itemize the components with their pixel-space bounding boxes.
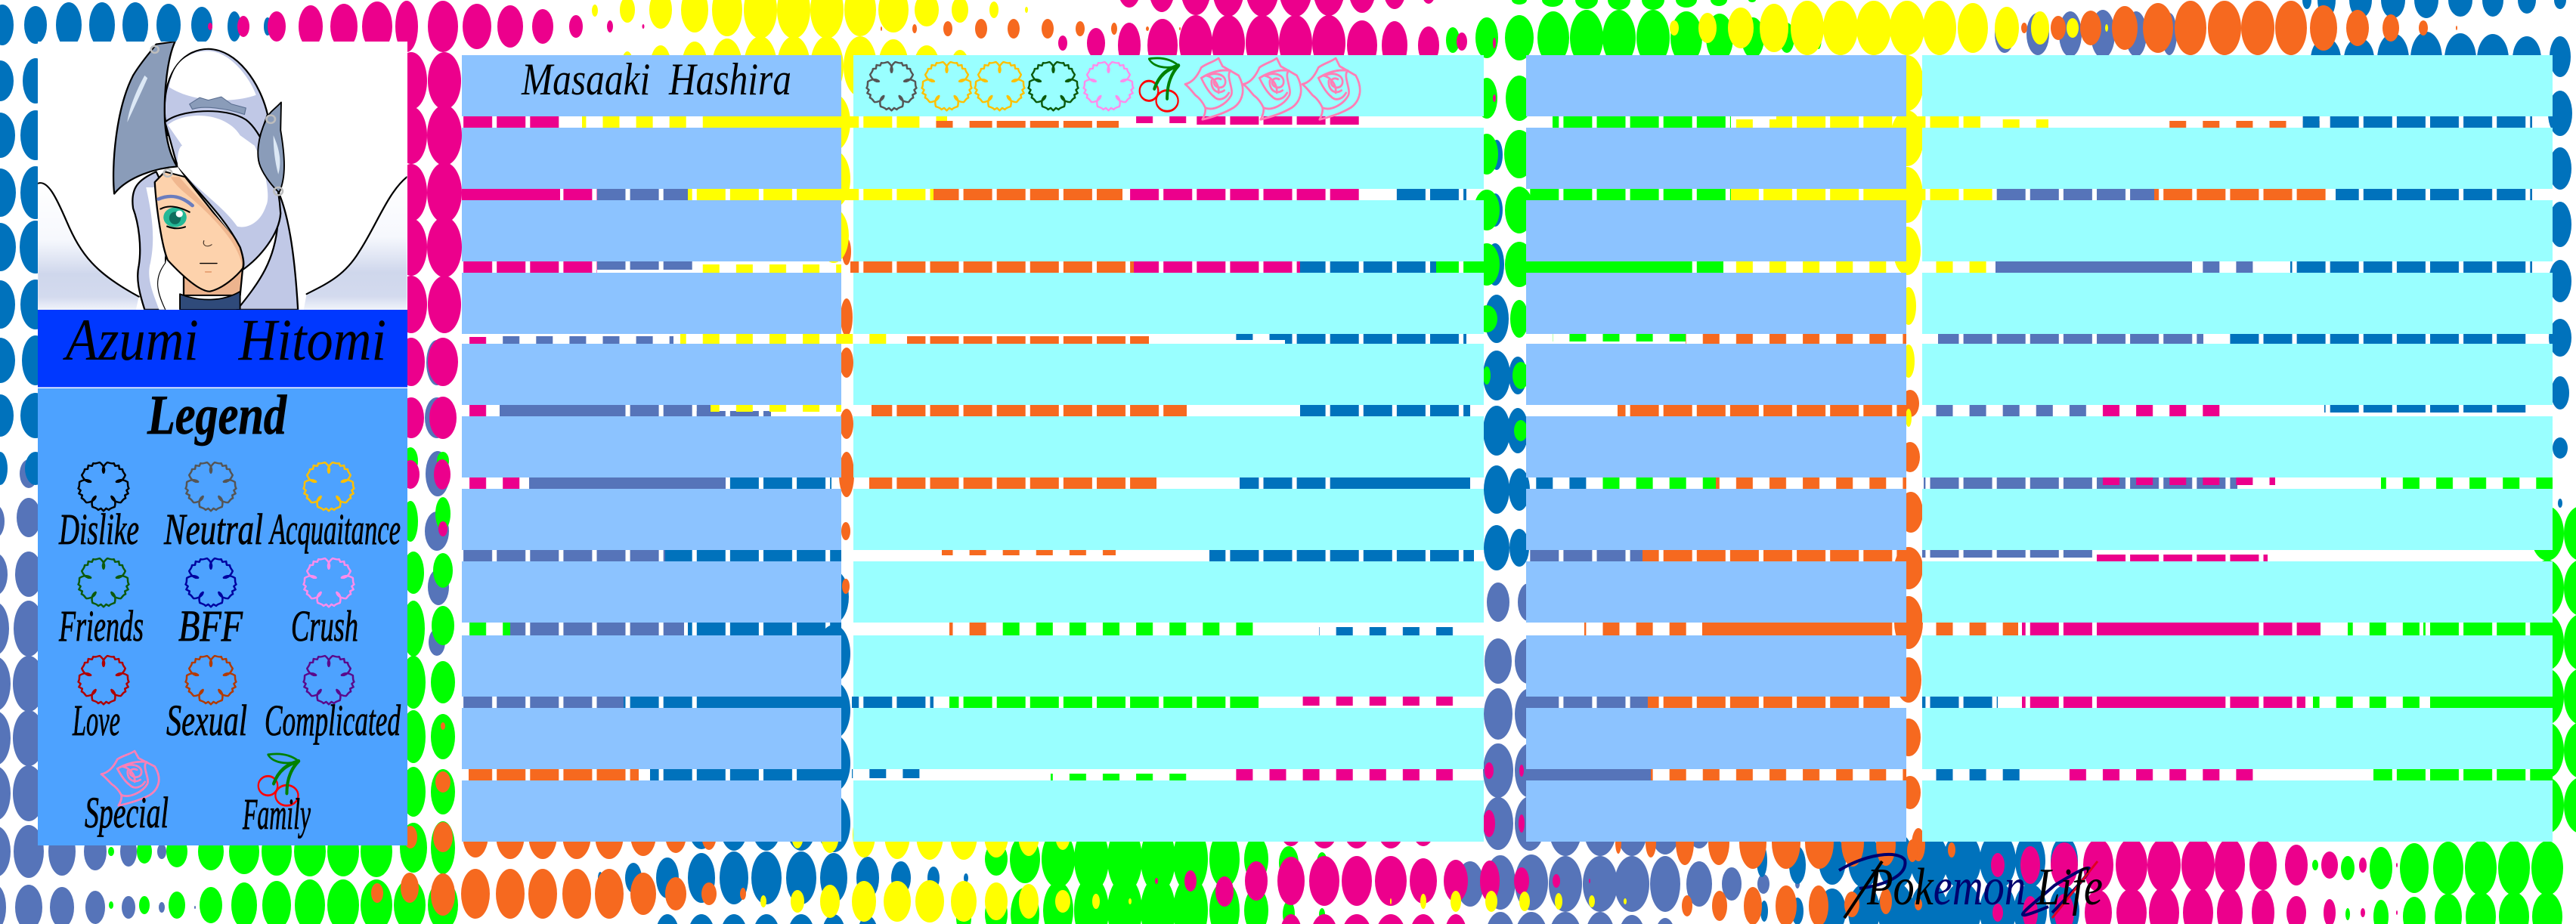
legend item: Acquaitance: Acquaitance [268,505,401,554]
legend item: Acquaitance [268,459,401,554]
legend item: BFF: BFF [178,601,243,651]
legend item: Dislike: Dislike [58,505,139,554]
legend item: Sexual [166,652,247,745]
panel: legend [38,385,407,845]
silver rings [151,46,283,195]
legend item: Special [85,751,169,837]
back of hair bun [165,49,268,135]
legend item: Sexual: Sexual [166,696,247,745]
left wing [38,234,139,310]
right wing [304,230,407,310]
panel: first table, name column [462,55,841,842]
legend item: Crush [291,555,358,651]
legend item: Neutral: Neutral [163,505,263,554]
signature: Pokemon Life: Pokemon Life [1866,858,2103,916]
legend item: BFF [178,555,243,651]
panel: second table, name column [1526,55,1906,842]
panel: character portrait [38,42,407,310]
legend item: Friends [58,555,144,651]
panel: second table, relationship column [1922,55,2553,842]
icon: family cherry [1140,58,1178,111]
fringe hair [165,111,280,270]
legend item: Neutral [163,459,263,554]
icon: acquaintance flower [972,58,1027,110]
row name: Masaaki Hashira: Masaaki Hashira [521,54,791,104]
headband frill [190,97,246,115]
icon: special rose [1243,58,1301,119]
right blade ornament [258,102,284,193]
legend item: Love [72,652,132,745]
panel: first table, relationship column [853,55,1484,842]
row gap fragments of the dot pattern [461,116,2553,780]
legend item: Love: Love [72,696,120,745]
long hair strands [237,182,298,310]
neck and collar [183,270,243,296]
legend item: Complicated [265,652,401,745]
legend item: Crush: Crush [291,601,358,651]
icon: friends flower [1026,58,1081,110]
legend item: Special: Special [85,788,169,837]
face [155,172,243,292]
icon: neutral flower [864,58,919,110]
icon: special rose [1302,58,1360,119]
legend item: Friends: Friends [58,601,144,651]
legend item: Complicated: Complicated [265,696,401,745]
legend item: Family: Family [242,790,311,839]
legend item: Family [242,754,311,839]
icon: special rose [1185,58,1243,119]
name bar: Azumi Hitomi: Azumi Hitomi [62,307,386,372]
legend item: Dislike [58,459,139,554]
icon: crush flower [1081,58,1136,110]
relationship icons for Masaaki Hashira [864,58,1360,119]
left blade ornament [113,42,177,194]
icon: acquaintance flower [919,58,974,110]
eyebrow, eye, nose, mouth [159,196,192,206]
legend title: Legend [147,385,287,447]
